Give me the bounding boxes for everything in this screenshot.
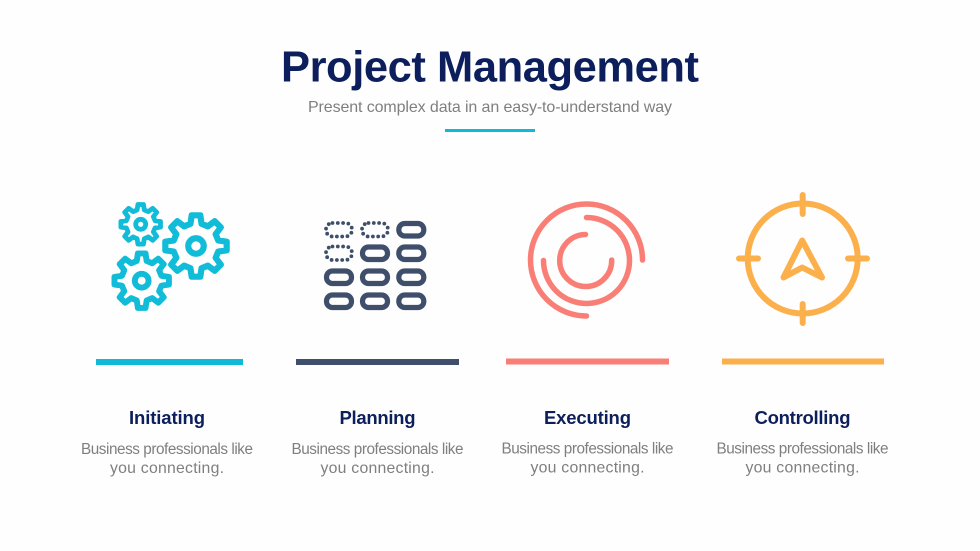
title underline (445, 129, 535, 132)
bar: Planning (296, 359, 459, 365)
bar: Executing (506, 358, 669, 364)
text: Initiating description (81, 441, 253, 477)
text: Controlling description: you connecting. (746, 460, 860, 476)
heading: Initiating: Initiating (129, 407, 205, 428)
text: Initiating description: Business professionals like (81, 441, 253, 458)
icon: gears (114, 204, 227, 308)
column: Executing (502, 204, 674, 476)
text: Executing description: you connecting. (530, 460, 644, 476)
text: Controlling description (716, 440, 888, 476)
column: Initiating (81, 204, 253, 477)
column: Planning (292, 223, 464, 477)
text: Executing description (502, 440, 674, 476)
title: Project Management (281, 44, 699, 92)
text: Initiating description: you connecting. (110, 460, 224, 477)
text: Planning description: you connecting. (320, 460, 434, 477)
text: Planning description: Business professionals like (292, 441, 464, 458)
subtitle: Present complex data in an easy-to-understand way (308, 99, 672, 116)
icon: compass target (739, 195, 867, 323)
icon: concentric arcs (531, 204, 642, 316)
text: Controlling description: Business professionals like (716, 440, 888, 458)
heading: Planning: Planning (340, 407, 416, 428)
text: Planning description (292, 441, 464, 477)
text: Executing description: Business professionals like (502, 440, 674, 458)
bar: Initiating (96, 359, 243, 365)
column: Controlling (716, 195, 888, 476)
heading: Executing: Executing (544, 407, 631, 428)
bar: Controlling (722, 358, 884, 364)
heading: Controlling: Controlling (754, 407, 850, 428)
icon: grid of rounded slots (326, 223, 424, 308)
